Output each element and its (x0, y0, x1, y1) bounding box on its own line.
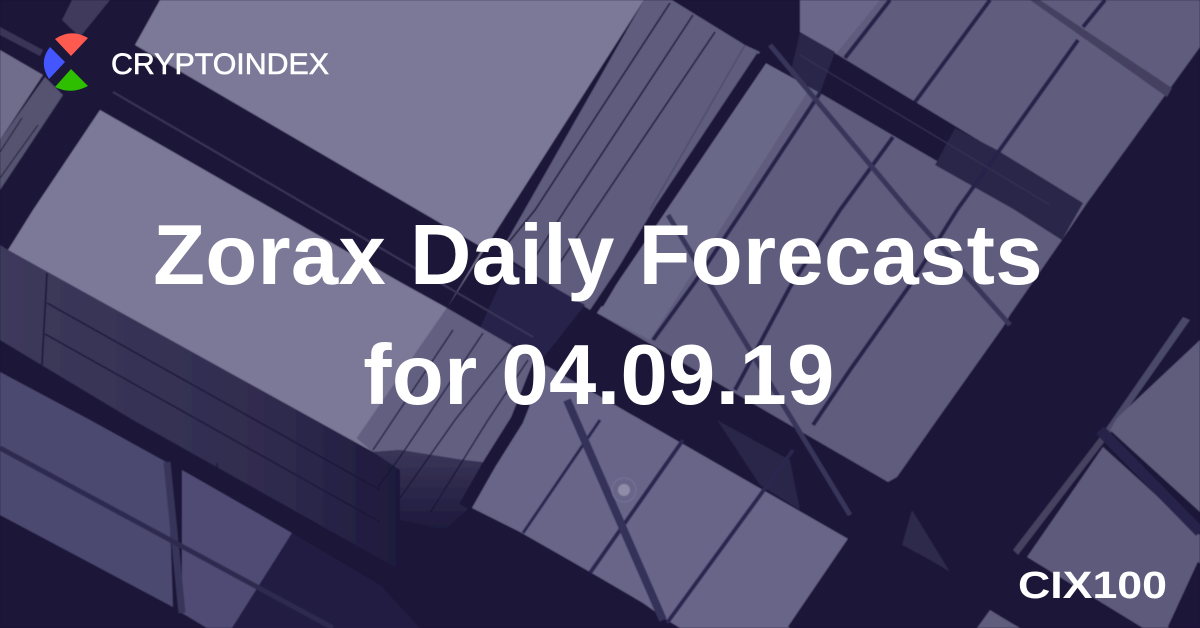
CIX100 label: CIX100 (1018, 565, 1167, 607)
logo: Cryptoindex mark (44, 33, 88, 91)
logo wordmark: CRYPTOINDEX (111, 48, 329, 81)
title: for 04.09.19 (363, 328, 835, 423)
title: Zorax Daily Forecasts (153, 208, 1043, 303)
thin mullions (508, 3, 670, 243)
title (153, 208, 1043, 423)
